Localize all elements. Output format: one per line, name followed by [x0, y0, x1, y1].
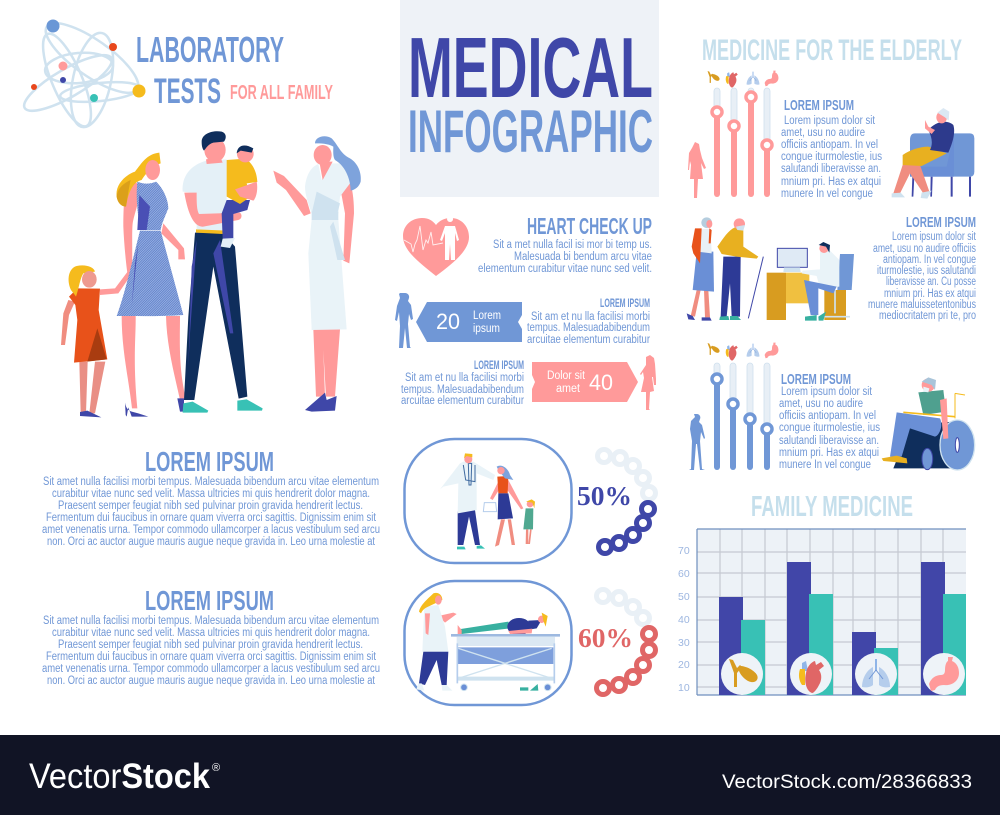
desk [767, 248, 846, 320]
axis labels: 70 [678, 545, 690, 557]
text block: elderly 1: LOREM IPSUM [784, 97, 854, 114]
text block: heart check up [478, 239, 652, 275]
arrow: 20 lorem ipsum: Lorem [473, 310, 501, 322]
title: medical: MEDICAL [408, 21, 653, 116]
illustration: family with doctor [61, 131, 361, 417]
text block: elderly 2 [868, 214, 977, 322]
heading: laboratory tests: TESTS [154, 72, 221, 111]
text block: left lorem: Sit am et nu lla facilisi morbi [405, 372, 524, 384]
text block: left lorem: tempus. Malesuadabibendum [401, 384, 524, 396]
figure: mother [116, 153, 186, 417]
bars: indigo [719, 562, 945, 695]
text block: elderly 1: munere In vel congue [781, 188, 873, 200]
text block: elderly 3: officiis antiopam. In vel [779, 410, 876, 422]
text block: right lorem: arcuitae elementum curabitur [527, 334, 650, 346]
text block: left lorem: arcuitae elementum curabitur [401, 395, 524, 407]
panel: nurse with patient [404, 581, 572, 705]
label: 50%: 50% [577, 481, 632, 511]
heading: lorem ipsum left 2: LOREM IPSUM [145, 585, 274, 616]
text block left 1: amet venenatis urna. Tempor commodo ullamcorper a lacus vestibulum sed arcu [42, 524, 380, 536]
figure: elderly woman [687, 217, 714, 321]
text block left 1: Fermentum dui faucibus in ornare quam viverra orci sagittis. Dignissim enim sit [46, 512, 377, 524]
arrow: dolor sit amet 40 [532, 362, 638, 402]
text block: right lorem: Sit am et nu lla facilisi morbi [531, 311, 650, 323]
silhouette: man small [689, 414, 705, 470]
axis labels: 10 [678, 682, 690, 694]
label: 60%: 60% [578, 623, 633, 653]
text block: elderly 1: officiis antiopam. In vel [781, 139, 878, 151]
text block: right lorem: LOREM IPSUM [600, 298, 650, 310]
slider chart: blue [712, 363, 772, 470]
silhouette: man [395, 293, 413, 348]
text block: elderly 2: Lorem ipsum dolor sit [892, 231, 977, 243]
silhouette: woman [640, 355, 656, 410]
text block left 2: Fermentum dui faucibus in ornare quam viverra orci sagittis. Dignissim enim sit [46, 651, 377, 663]
organ icons row 1 [708, 71, 778, 88]
title: infographic: INFOGRAPHIC [408, 98, 653, 165]
text block left 2 [42, 615, 380, 687]
text block left 1: non. Orci ac auctor augue mauris augue neque gravida in. Leo urna molestie at [47, 536, 376, 548]
figure: seated doctor [802, 242, 854, 321]
text block: elderly 3: amet, usu no audire [779, 398, 863, 410]
text block left 2: curabitur vitae nunc sed velit. Massa ultricies mi quis hendrerit dolor magna. [52, 627, 370, 639]
axis labels: 60 [678, 568, 690, 580]
text block: elderly 2: mediocritatem pri te, pro [879, 310, 976, 322]
arrow: 20 lorem ipsum [416, 302, 522, 342]
text block: elderly 3: Lorem ipsum dolor sit [781, 386, 873, 398]
text block: elderly 1: mnium pri. Has ex atqui [781, 176, 881, 188]
text block: elderly 3: munere In vel congue [779, 459, 871, 471]
text block: heart check up: Sit a met nulla facil isi mor bi temp us. [493, 239, 652, 251]
heading: heart check up: HEART CHECK UP [527, 213, 652, 239]
panel: doctor with family [404, 439, 572, 563]
text block: right lorem [527, 298, 650, 346]
bars: teal [741, 594, 966, 695]
text block left 2: non. Orci ac auctor augue mauris augue neque gravida in. Leo urna molestie at [47, 675, 376, 687]
slider chart: pink [712, 88, 772, 197]
text block: right lorem: tempus. Malesuadabibendum [527, 322, 650, 334]
axis labels: 30 [678, 637, 690, 649]
text block: elderly 1: salutandi liberavisse an. [781, 163, 881, 175]
text block: elderly 1 [781, 97, 882, 200]
icon: heart with ecg and person [403, 216, 469, 276]
ring gauge: 60% [596, 590, 656, 694]
illustration: elderly woman in armchair [892, 108, 974, 199]
text block: elderly 3: congue iturmolestie, ius [779, 422, 880, 434]
arrow: dolor sit amet 40: amet [556, 383, 581, 395]
figure: elderly man with cane [717, 218, 763, 320]
axis labels: 20 [678, 659, 690, 671]
text block left 1: curabitur vitae nunc sed velit. Massa ultricies mi quis hendrerit dolor magna. [52, 488, 370, 500]
organ badges [721, 653, 965, 695]
registered mark: ® [212, 762, 220, 774]
arrow: 20 lorem ipsum: ipsum [473, 323, 500, 335]
text block: left lorem: LOREM IPSUM [474, 360, 524, 372]
ring gauge: 50% [598, 450, 656, 554]
heading: family medicine: FAMILY MEDICINE [751, 491, 913, 523]
text block left 1: Praesent semper feugiat nibh sed pulvinar proin gravida hendrerit lectus. [58, 500, 363, 512]
axis labels: 50 [678, 591, 690, 603]
heading: laboratory tests [136, 29, 333, 111]
illustration: man in wheelchair [882, 377, 975, 470]
organ icons row 2 [708, 343, 778, 361]
text block: heart check up: Malesuada bi bendum arcu vitae [514, 251, 652, 263]
logo: atom [18, 12, 147, 132]
arrow: 20 lorem ipsum: 20 [436, 309, 460, 334]
axis labels [678, 545, 690, 694]
watermark url: VectorStock.com/28366833 [722, 772, 972, 793]
text block left 1: Sit amet nulla facilisi morbi tempus. Malesuada bibendum arcu vitae elementum [43, 476, 379, 488]
heading: lorem ipsum left 1: LOREM IPSUM [145, 446, 274, 477]
text block: elderly 3: mnium pri. Has ex atqui [779, 447, 879, 459]
axis labels: 40 [678, 614, 690, 626]
watermark logo: VectorStock [29, 757, 210, 796]
figure: father holding child [183, 131, 263, 413]
heading: laboratory tests: LABORATORY [136, 29, 284, 70]
text block: elderly 3: LOREM IPSUM [781, 371, 851, 388]
arrow: dolor sit amet 40: 40 [589, 370, 613, 395]
panel: main title [400, 0, 659, 197]
text block: heart check up: elementum curabitur vitae nunc sed velit. [478, 263, 652, 275]
text block: elderly 1: Lorem ipsum dolor sit [784, 115, 876, 127]
text block: elderly 1: congue iturmolestie, ius [781, 151, 882, 163]
footer bar [0, 735, 1000, 815]
text block left 1 [42, 476, 380, 548]
illustration: elderly couple at doctor's desk [687, 217, 854, 321]
arrow: dolor sit amet 40: Dolor sit [547, 370, 586, 382]
silhouette: woman small [688, 142, 706, 198]
bar chart: family medicine [678, 529, 966, 695]
text block: left lorem [401, 360, 524, 407]
figure: doctor woman [273, 136, 361, 412]
text block: elderly 3: salutandi liberavisse an. [779, 435, 879, 447]
text block left 2: amet venenatis urna. Tempor commodo ullamcorper a lacus vestibulum sed arcu [42, 663, 380, 675]
figure: girl [61, 265, 131, 417]
text block left 2: Sit amet nulla facilisi morbi tempus. Malesuada bibendum arcu vitae elementum [43, 615, 379, 627]
heading: laboratory tests: FOR ALL FAMILY [230, 82, 333, 104]
text block: elderly 1: amet, usu no audire [781, 127, 865, 139]
text block: elderly 3 [779, 371, 880, 471]
text block left 2: Praesent semper feugiat nibh sed pulvinar proin gravida hendrerit lectus. [58, 639, 363, 651]
